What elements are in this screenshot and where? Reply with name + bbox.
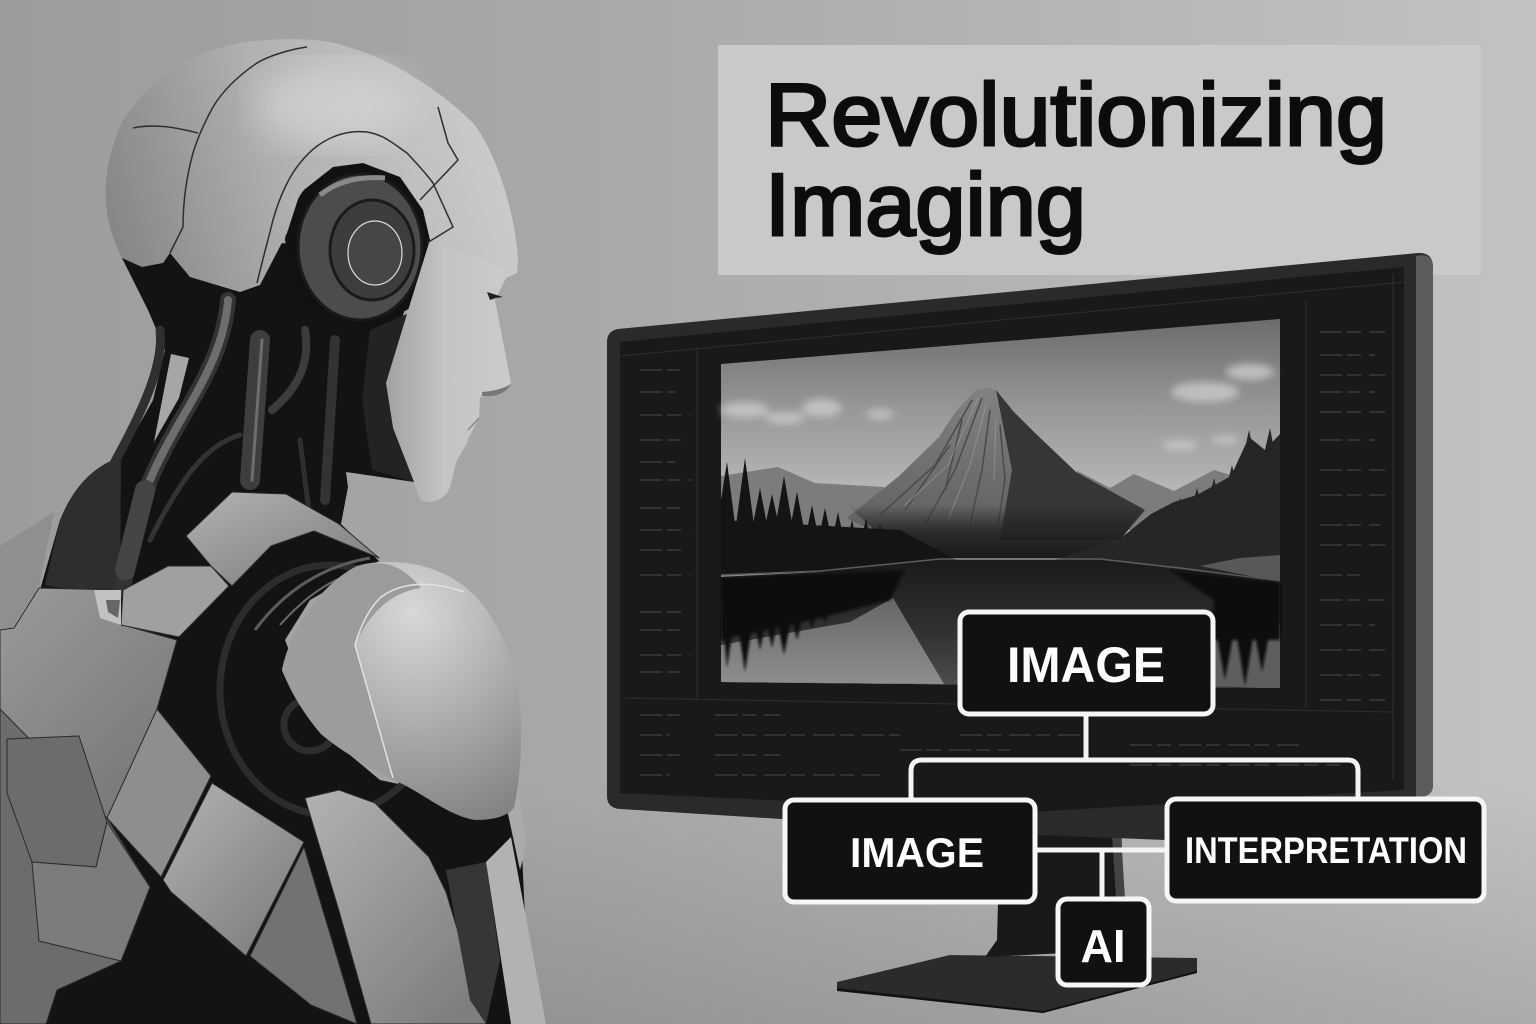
forearm joint [446, 862, 500, 1024]
lake reflection trees [721, 570, 1280, 686]
title text: Revolutionizing [765, 65, 1387, 164]
dome highlight [255, 63, 415, 147]
robot [0, 39, 546, 1024]
right forest [1050, 428, 1280, 584]
shoulder ring cables [220, 558, 440, 815]
monitor frame [607, 253, 1433, 840]
node: left image [785, 800, 1035, 902]
clouds [721, 364, 1274, 450]
node: AI [1058, 899, 1149, 985]
screen interface lines [620, 274, 1404, 780]
flowchart [785, 612, 1484, 985]
forearm strip [486, 837, 546, 1024]
title panel [718, 45, 1481, 275]
lake [721, 560, 1280, 688]
distant ranges [721, 467, 1240, 530]
lower back panel [7, 736, 107, 867]
small shoulder plate [121, 566, 229, 637]
node: left image: IMAGE [850, 829, 984, 876]
mechanical neck and torso internals [0, 240, 530, 1024]
node: interpretation: INTERPRETATION [1185, 830, 1467, 871]
back armor plates [0, 492, 379, 1024]
title text: Imaging [765, 155, 1086, 254]
centre plate [163, 783, 304, 956]
back plate [0, 588, 211, 877]
left forest [721, 458, 960, 575]
mountain photo on screen [721, 319, 1280, 688]
forearm plate [305, 790, 486, 1024]
ear module [298, 174, 422, 320]
top shoulder plate [186, 492, 379, 586]
lips [468, 418, 479, 430]
shoulder orb [282, 562, 521, 820]
cheek shading [386, 240, 511, 502]
neck gap [154, 354, 189, 442]
under plate [250, 847, 357, 1024]
monitor [607, 253, 1433, 1013]
ear backing [285, 160, 432, 330]
skull and face shell [106, 39, 518, 502]
node: top image [960, 612, 1213, 714]
forearm right sliver [505, 788, 527, 870]
monitor stand [837, 820, 1197, 1013]
head [106, 39, 518, 502]
eye [487, 292, 503, 300]
connectors [911, 716, 1358, 897]
node: top image: IMAGE [1007, 637, 1165, 693]
node: AI: AI [1080, 920, 1126, 972]
dome seams [133, 47, 458, 283]
nose underside [482, 384, 511, 396]
upper back plate [0, 512, 54, 630]
monitor screen [620, 267, 1404, 812]
jaw mechanics [362, 314, 414, 482]
latch [94, 590, 121, 625]
wedge plate [107, 709, 211, 877]
lower plate [32, 822, 150, 961]
cables [80, 300, 335, 590]
shore lines [721, 559, 1280, 581]
node: interpretation [1167, 799, 1484, 901]
lake reflection light [721, 598, 944, 684]
title text [765, 65, 1387, 254]
central peak [847, 387, 1145, 558]
base armor [0, 700, 150, 1024]
